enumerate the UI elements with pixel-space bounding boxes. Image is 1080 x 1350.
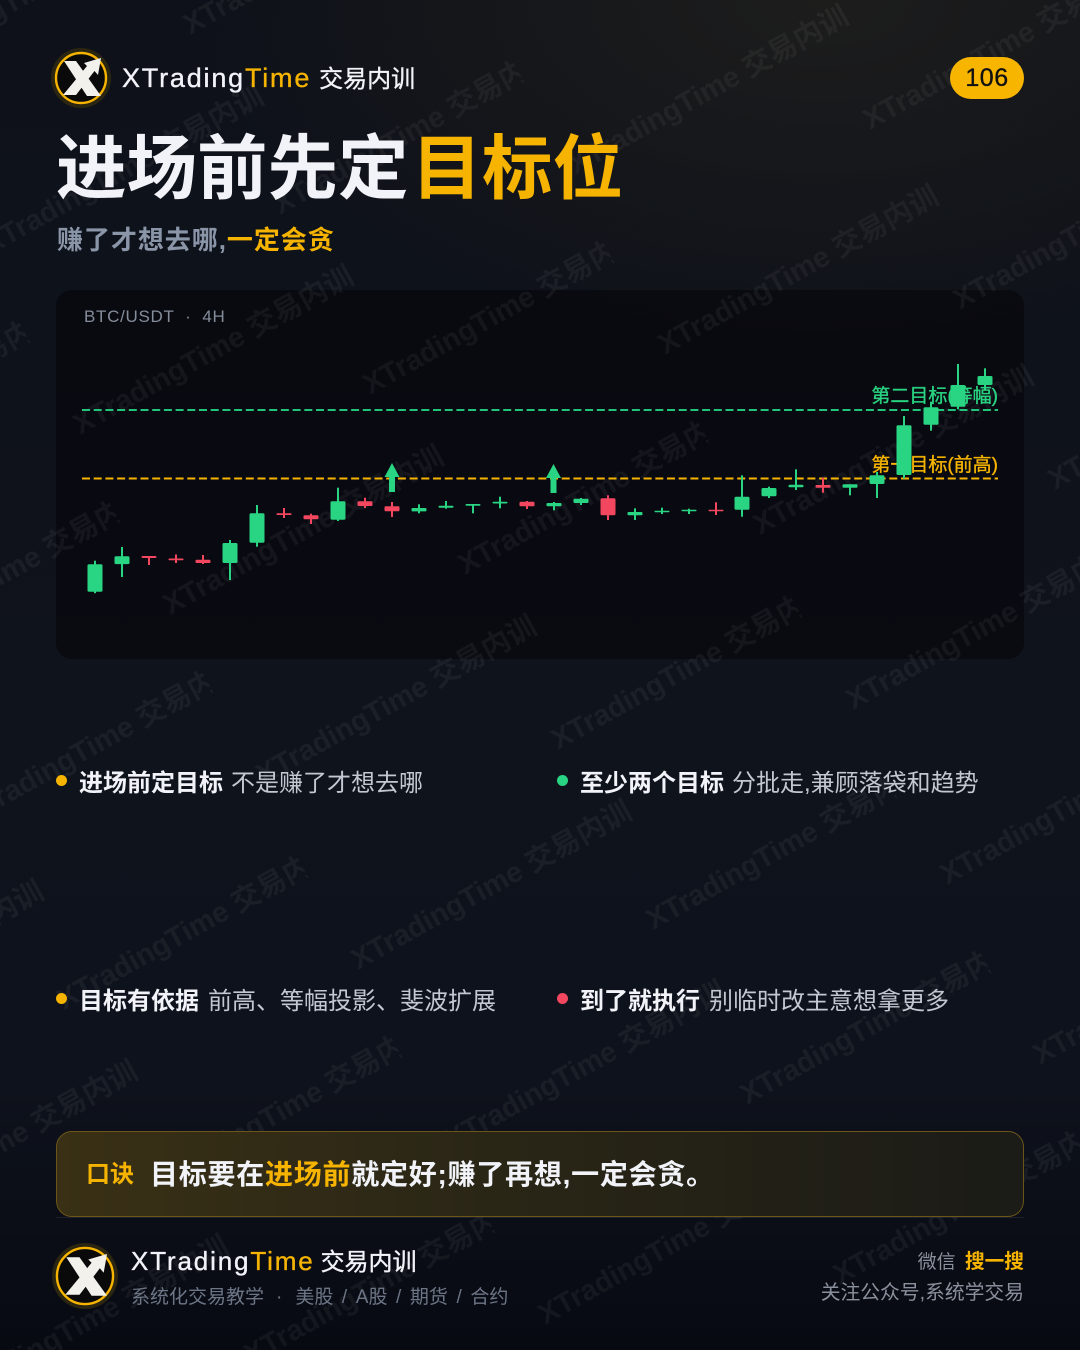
issue number badge bbox=[950, 57, 1024, 99]
callout text: 目标要在进场前就定好;赚了再想,一定会贪。 bbox=[150, 1159, 715, 1190]
watermark pattern: XTradingTime 交易内训 bbox=[157, 439, 449, 621]
first target label: 第一目标(前高) bbox=[871, 454, 998, 476]
watermark pattern: XTradingTime 交易内训 bbox=[640, 754, 932, 936]
bullet dot bbox=[557, 775, 568, 786]
callout tag: 口诀 bbox=[86, 1161, 134, 1188]
watermark pattern: XTradingTime 交易内训 bbox=[345, 794, 637, 976]
callout: mnemonic bbox=[56, 1131, 1024, 1217]
watermark pattern: XTradingTime 交易内训 bbox=[357, 219, 649, 401]
bullet text: 目标有依据 前高、等幅投影、斐波扩展 bbox=[79, 988, 496, 1015]
panel: candlestick chart bbox=[56, 290, 1024, 659]
watermark pattern: XTradingTime 交易内训 bbox=[532, 1149, 824, 1331]
watermark pattern: XTradingTime 交易内训 bbox=[439, 974, 731, 1156]
watermark pattern: XTradingTime 交易内训 bbox=[734, 929, 1026, 1111]
second target label: 第二目标(等幅) bbox=[871, 385, 998, 407]
watermark pattern: XTradingTime 交易内训 bbox=[145, 1014, 437, 1196]
bullet: at least two targets bbox=[557, 770, 979, 797]
bullet text: 到了就执行 别临时改主意想拿更多 bbox=[580, 988, 949, 1015]
chart graphics bbox=[82, 364, 998, 594]
bullet: execute on arrival bbox=[557, 988, 949, 1015]
footer logo icon bbox=[52, 1243, 118, 1309]
bullet dot bbox=[557, 993, 568, 1004]
footer follow note: 关注公众号,系统学交易 bbox=[821, 1282, 1024, 1304]
watermark pattern: XTradingTime 交易内训 bbox=[67, 259, 359, 441]
subtitle: 赚了才想去哪,一定会贪 bbox=[57, 225, 335, 255]
watermark pattern: XTradingTime 交易内训 bbox=[452, 399, 744, 581]
footer tagline: 系统化交易教学 · 美股 / A股 / 期货 / 合约 bbox=[131, 1287, 508, 1308]
bullet dot bbox=[56, 993, 67, 1004]
first target line bbox=[82, 478, 998, 480]
header brand name: XTradingTime 交易内训 bbox=[122, 63, 415, 93]
footer brand name: XTradingTime交易内训 bbox=[131, 1246, 417, 1276]
watermark pattern: XTradingTime 交易内训 bbox=[250, 609, 542, 791]
watermark pattern: XTradingTime 交易内训 bbox=[51, 834, 343, 1016]
title: 进场前先定目标位 bbox=[56, 129, 623, 208]
candlesticks bbox=[88, 364, 992, 593]
watermark pattern: XTradingTime 交易内训 bbox=[747, 359, 1039, 541]
bullet: targets have basis bbox=[56, 988, 496, 1015]
chart symbol label: BTC/USDT · 4H bbox=[84, 307, 225, 326]
bullet text: 至少两个目标 分批走,兼顾落袋和趋势 bbox=[580, 770, 979, 797]
bullet dot bbox=[56, 775, 67, 786]
issue number badge: 106 bbox=[965, 64, 1009, 92]
bullet text: 进场前定目标 不是赚了才想去哪 bbox=[79, 770, 423, 797]
arrow: second breakout bbox=[546, 464, 561, 493]
header logo icon bbox=[51, 48, 111, 108]
second target line bbox=[82, 409, 998, 411]
watermark pattern: XTradingTime 交易内训 bbox=[562, 0, 854, 181]
watermark pattern: XTradingTime 交易内训 bbox=[545, 574, 837, 756]
watermark pattern: XTradingTime 交易内训 bbox=[267, 39, 559, 221]
bullet: targets before entry bbox=[56, 770, 423, 797]
footer wechat search: 微信 搜一搜 bbox=[918, 1251, 1024, 1273]
arrow: first breakout bbox=[384, 463, 400, 492]
watermark pattern: XTradingTime 交易内训 bbox=[652, 179, 944, 361]
